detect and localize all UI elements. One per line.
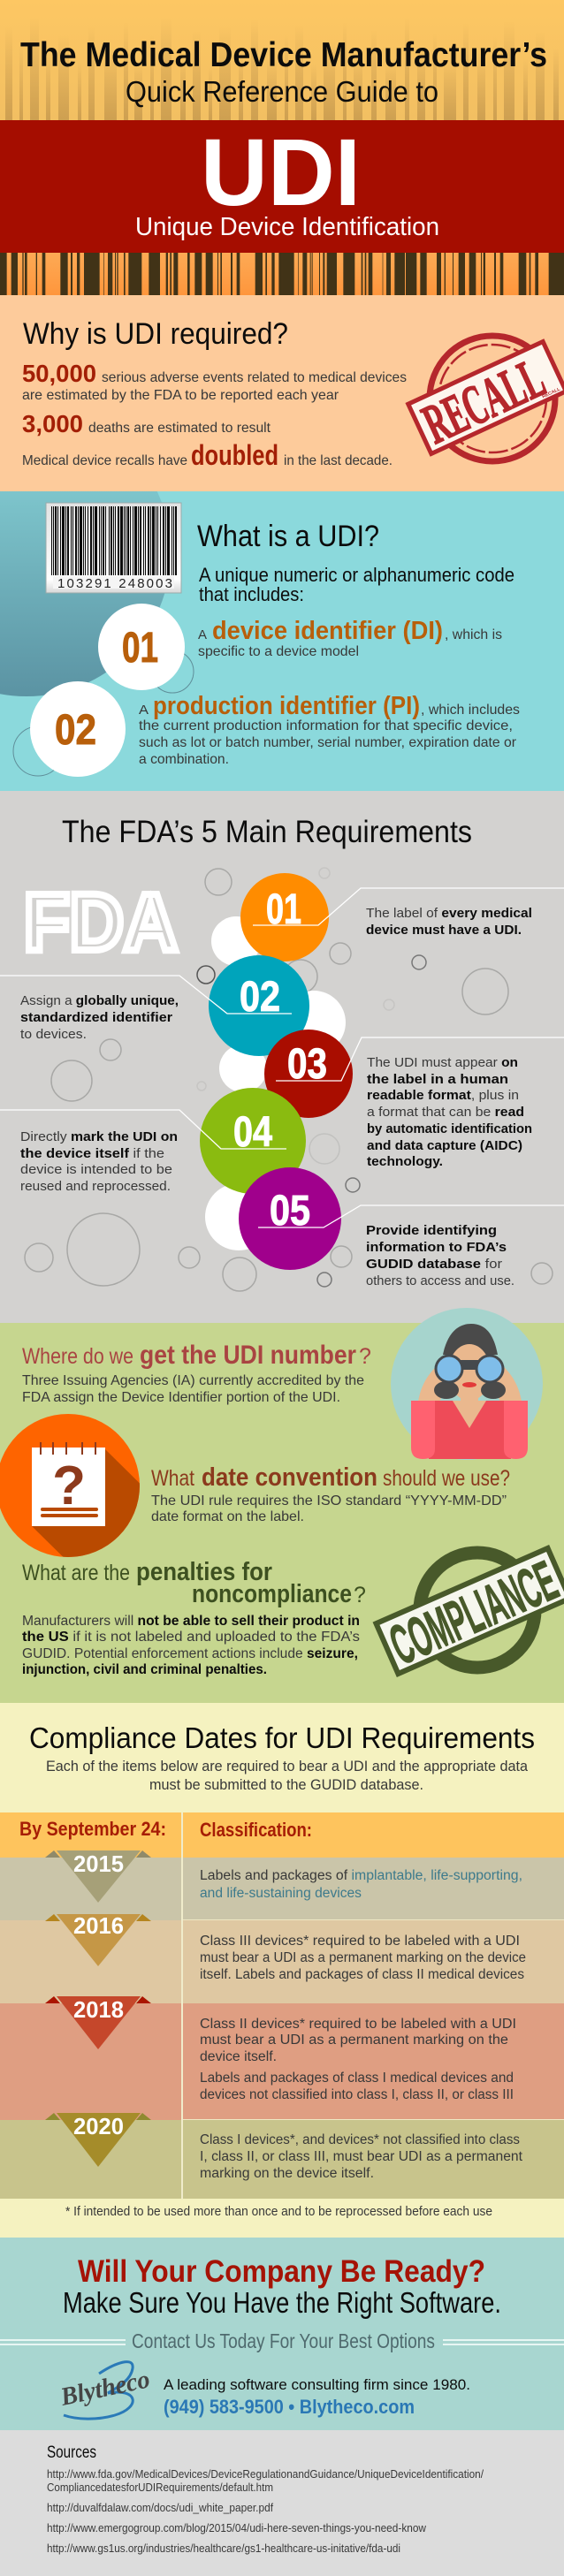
requirement circle 01 (240, 873, 329, 961)
text: device identifier: device identifier (DI) (212, 617, 443, 645)
stat: doubled: in the last decade. (284, 453, 393, 468)
requirement circle 04: 04 (233, 1109, 272, 1156)
text: production identifier (139, 692, 520, 767)
requirement circle 04 (200, 1088, 306, 1194)
text: production identifier: the current production information for that specific device, (139, 718, 513, 733)
requirement circle 03: 03 (287, 1041, 327, 1088)
requirement text 02: standardized identifier (20, 1010, 172, 1025)
question: date convention: date format on the label. (151, 1509, 304, 1524)
heading: Compliance Dates for UDI Requirements (29, 1721, 535, 1754)
source list: http://www.emergogroup.com/blog/2015/04/udi-here-seven-things-you-need-know (47, 2521, 427, 2534)
requirement text 02 (20, 993, 179, 1042)
stat: 3,000: deaths are estimated to result (88, 421, 271, 436)
requirement circle 05 (239, 1167, 341, 1270)
row: 2020: Class I devices*, and devices* not classified into class (200, 2132, 520, 2147)
panel: UDI questions (0, 1308, 564, 1703)
requirement text 01: device must have a UDI. (366, 923, 522, 938)
requirement text 03: a format that can be read (367, 1105, 524, 1120)
requirement text 05: information to FDA’s (366, 1240, 507, 1255)
requirement text 03: and data capture (AIDC) (367, 1138, 522, 1153)
requirement text 03: readable format , plus in (367, 1088, 519, 1103)
title line 2: Quick Reference Guide to (126, 75, 438, 108)
row: 2018: must bear a UDI as a permanent marking on the (200, 2033, 508, 2048)
logo: Blytheco: Blytheco (57, 2365, 152, 2412)
icon: calendar question mark: ? (52, 1455, 86, 1516)
phone and website: (949) 583-9500 • Blytheco.com (164, 2396, 415, 2418)
question: penalties: penalties for (136, 1558, 272, 1586)
row: 2016: itself. Labels and packages of class II medical devices (200, 1967, 524, 1982)
row: 2018: device itself. (200, 2049, 277, 2064)
requirement text 03: The UDI must appear on (367, 1055, 518, 1070)
question: UDI number: Three Issuing Agencies (IA) currently accredited by the (22, 1373, 364, 1388)
text: production identifier: such as lot or batch number, serial number, expiration date or (139, 735, 517, 750)
question: penalties: injunction, civil and criminal penalties. (22, 1662, 267, 1677)
text: production identifier: production identifier (PI) (153, 692, 420, 720)
question: date convention: date convention (202, 1463, 377, 1492)
footnote: * If intended to be used more than once and to be reprocessed before each use (65, 2204, 492, 2219)
panel: why is UDI required (0, 295, 564, 491)
requirement text 01: The label of every medical (366, 906, 532, 921)
row: 2015: and life-sustaining devices (200, 1886, 362, 1901)
description (199, 564, 514, 605)
source list (47, 2467, 484, 2555)
source list: CompliancedatesforUDIRequirements/default.htm (47, 2481, 273, 2494)
requirement circle 02: 02 (240, 974, 280, 1021)
icon: compliance stamp (375, 1546, 564, 1679)
text: production identifier: , which includes (421, 703, 520, 718)
panel: FDA five main requirements (0, 791, 564, 1324)
requirement text 03: by automatic identification (367, 1121, 532, 1136)
source list: http://www.fda.gov/MedicalDevices/DeviceRegulationandGuidance/UniqueDeviceIdentification/ (47, 2467, 484, 2481)
stat: 50,000 (22, 360, 407, 403)
panel: header title (0, 0, 564, 120)
subtitle: Unique Device Identification (135, 213, 439, 241)
question: penalties: What are the (22, 1561, 130, 1585)
icon: recall stamp: RECALL (541, 387, 561, 399)
requirement text 05: others to access and use. (366, 1273, 514, 1288)
requirement circle 02 (209, 955, 309, 1056)
badge 01: 01 (122, 625, 158, 672)
text: production identifier: A (139, 703, 149, 718)
row: 2018: devices not classified into class I, class II, or class III (200, 2087, 514, 2102)
row: 2016: 2016 (73, 1912, 124, 1939)
question: date convention: What (151, 1466, 194, 1491)
question: UDI number: FDA assign the Device Identifier portion of the UDI. (22, 1390, 340, 1405)
question: date convention (151, 1463, 510, 1524)
table header: Classification: (200, 1819, 312, 1841)
row: 2016: must bear a UDI as a permanent marking on the device (200, 1950, 526, 1965)
text: device identifier (198, 617, 502, 659)
question: penalties: Manufacturers will not be able to sell their product in (22, 1614, 360, 1629)
source list: http://duvalfdalaw.com/docs/udi_white_paper.pdf (47, 2501, 273, 2514)
text: device identifier: , which is (445, 627, 502, 642)
heading: Sources (47, 2443, 96, 2462)
question: penalties: GUDID. Potential enforcement actions include seizure, (22, 1646, 358, 1661)
stat: doubled: Medical device recalls have (22, 453, 187, 468)
contact line: Contact Us Today For Your Best Options (132, 2329, 435, 2352)
row: 2018 (0, 1996, 564, 2120)
icon: barcode label (46, 503, 181, 593)
icon: calendar question mark (0, 1414, 140, 1557)
requirement text 01 (366, 906, 532, 938)
badge 02 (30, 681, 126, 777)
white accent circles (205, 916, 346, 1250)
question: UDI number (22, 1341, 371, 1405)
table header (0, 1812, 564, 1858)
question: date convention: should we use? (383, 1466, 510, 1491)
stat: 50,000: are estimated by the FDA to be reported each year (22, 388, 339, 403)
question: UDI number: ? (359, 1344, 371, 1369)
requirement text 02: to devices. (20, 1027, 87, 1042)
heading: Why is UDI required? (23, 317, 288, 351)
heading: UDI: UDI (201, 118, 361, 225)
requirement text 04: device is intended to be (20, 1162, 172, 1177)
requirement text 04: reused and reprocessed. (20, 1179, 171, 1194)
panel: call to action (0, 2238, 564, 2430)
stat: doubled: doubled (191, 439, 278, 471)
table header: By September 24: (19, 1818, 166, 1840)
requirement text 05 (366, 1223, 514, 1288)
row: 2016 (0, 1912, 564, 2003)
requirement text 02: Assign a globally unique, (20, 993, 179, 1008)
description: that includes: (199, 583, 304, 605)
question: penalties: the US if it is not labeled and uploaded to the FDA’s (22, 1630, 360, 1645)
row: 2020: I, class II, or class III, must bear UDI as a permanent (200, 2149, 523, 2164)
stat: 3,000: 3,000 (22, 410, 83, 437)
badge 01 (98, 604, 185, 690)
requirement circle 05: 05 (270, 1188, 310, 1235)
row: 2018: 2018 (73, 1996, 124, 2023)
row: 2018: Labels and packages of class I medical devices and (200, 2071, 514, 2086)
panel: what is a UDI (0, 491, 564, 791)
question: UDI number: Where do we (22, 1344, 133, 1369)
question: penalties: ? (354, 1583, 366, 1607)
row: 2015: Labels and packages of implantable, life-supporting, (200, 1868, 522, 1883)
stat: 3,000 (22, 410, 271, 437)
stat: 50,000: serious adverse events related to medical devices (102, 370, 407, 385)
panel: sources (0, 2430, 564, 2576)
description: A unique numeric or alphanumeric code (199, 564, 514, 586)
stat: doubled (22, 439, 393, 471)
text: production identifier: a combination. (139, 752, 229, 767)
requirement text 04: Directly mark the UDI on (20, 1129, 178, 1144)
requirement text 05: Provide identifying (366, 1223, 497, 1238)
question: penalties (22, 1558, 366, 1677)
question: penalties: noncompliance (192, 1580, 352, 1608)
illustration: woman with binoculars (391, 1308, 543, 1460)
row: 2020 (0, 2113, 564, 2199)
intro text: Each of the items below are required to bear a UDI and the appropriate data (46, 1758, 529, 1774)
intro text (46, 1758, 529, 1793)
source list: http://www.gs1us.org/industries/healthcare/gs1-healthcare-us-initative/fda-udi (47, 2542, 400, 2555)
company description: A leading software consulting firm since 1980. (164, 2376, 470, 2393)
barcode strip (0, 253, 564, 295)
question: UDI number: get the UDI number (140, 1341, 356, 1370)
requirement text 03 (367, 1055, 532, 1169)
row: 2020: 2020 (73, 2113, 124, 2139)
badge 02: 02 (55, 707, 96, 754)
requirement circle 01: 01 (266, 886, 301, 933)
panel: compliance dates (0, 1703, 564, 2238)
panel: red title band (0, 118, 564, 253)
requirement text 03: technology. (367, 1154, 443, 1169)
row: 2018: Class II devices* required to be labeled with a UDI (200, 2017, 516, 2032)
requirement text 04 (20, 1129, 178, 1194)
intro text: must be submitted to the GUDID database. (149, 1776, 423, 1793)
text: device identifier: specific to a device model (198, 644, 359, 659)
row: 2015: 2015 (73, 1850, 124, 1877)
row: 2015 (0, 1850, 564, 1920)
heading: What is a UDI? (197, 520, 379, 553)
requirement text 04: the device itself if the (20, 1146, 164, 1161)
icon: FDA logo: FDA (24, 878, 178, 968)
row: 2020: marking on the device itself. (200, 2166, 374, 2181)
text: device identifier: A (198, 627, 207, 642)
requirement circle 03 (264, 1030, 353, 1118)
stat: 50,000: 50,000 (22, 360, 96, 387)
heading: The FDA’s 5 Main Requirements (62, 815, 472, 849)
question: date convention: The UDI rule requires the ISO standard “YYYY-MM-DD” (151, 1493, 507, 1508)
row: 2016: Class III devices* required to be labeled with a UDI (200, 1934, 520, 1949)
requirement text 05: GUDID database for (366, 1257, 502, 1272)
icon: barcode label: 103291 248003 (57, 576, 172, 591)
heading: Will Your Company Be Ready? (78, 2254, 485, 2289)
requirement text 03: the label in a human (367, 1072, 508, 1087)
